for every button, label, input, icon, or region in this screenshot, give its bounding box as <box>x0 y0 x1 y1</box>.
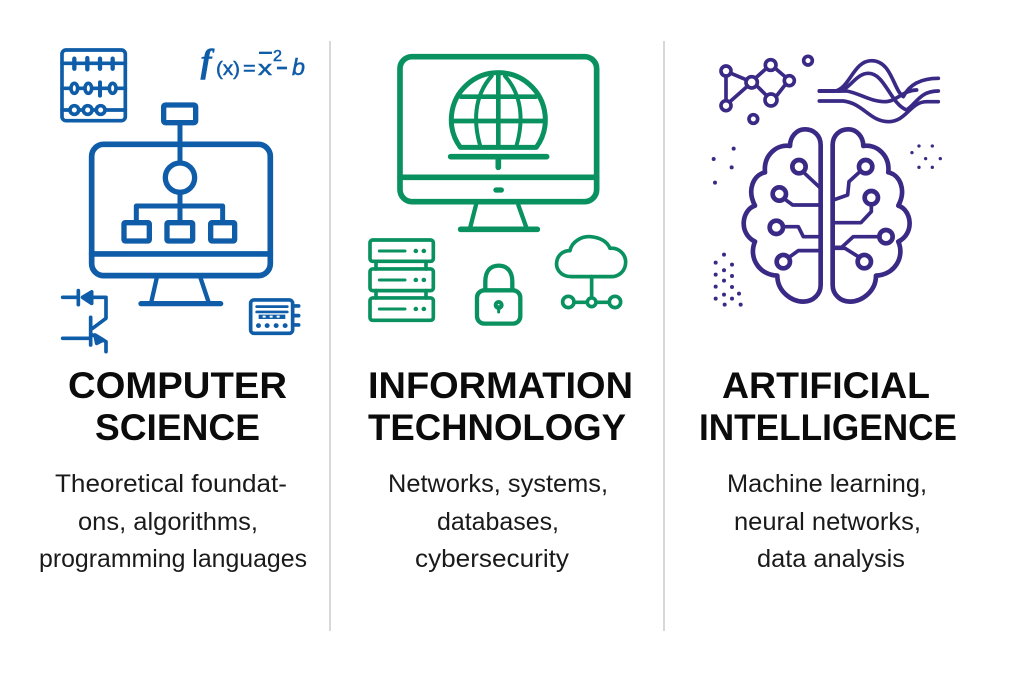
formula: f <box>201 44 215 81</box>
text: computer science description: ons, algorithms, <box>78 508 258 536</box>
heading: artificial intelligence: INTELLIGENCE <box>699 406 957 448</box>
text: artificial intelligence description: Machine learning, <box>727 470 927 498</box>
icon: monitor with hierarchy diagram <box>92 105 270 304</box>
heading: information technology: INFORMATION <box>368 364 633 406</box>
decorative data dots <box>712 144 942 307</box>
icon: diode and transistor symbol <box>63 291 106 352</box>
text: computer science description: Theoretical foundat- <box>55 470 287 498</box>
text: artificial intelligence description: neural networks, <box>734 508 921 536</box>
heading: information technology: TECHNOLOGY <box>368 406 626 448</box>
formula: (x) <box>216 59 240 80</box>
icon: padlock <box>477 266 520 324</box>
icon: cloud network <box>557 237 626 308</box>
text: artificial intelligence description: data analysis <box>757 545 905 573</box>
icon: microchip <box>251 300 299 333</box>
icon: brain with circuits <box>744 129 910 302</box>
icon: abacus <box>62 50 125 121</box>
text: information technology description: Networks, systems, <box>388 470 608 498</box>
text: computer science description: programming languages <box>39 545 307 573</box>
panel: computer science <box>39 44 307 573</box>
panel: artificial intelligence <box>699 56 957 573</box>
heading: computer science: COMPUTER <box>68 364 287 406</box>
icon group: computer science <box>62 44 305 352</box>
formula: x <box>258 57 273 80</box>
icon: node network <box>721 56 812 123</box>
formula <box>201 44 305 81</box>
formula: 2 <box>273 48 282 65</box>
formula: b <box>292 54 305 80</box>
panel: information technology <box>368 57 633 573</box>
icon: wave lines <box>819 61 938 122</box>
formula: = <box>243 57 256 80</box>
icon: server rack <box>370 240 433 320</box>
icon: monitor with globe <box>400 57 597 229</box>
icon group: artificial intelligence <box>712 56 942 307</box>
text: information technology description: databases, <box>437 508 559 536</box>
text: information technology description: cybersecurity <box>415 545 570 573</box>
icon group: information technology <box>370 57 626 324</box>
heading: artificial intelligence: ARTIFICIAL <box>722 364 930 406</box>
heading: computer science: SCIENCE <box>95 406 260 448</box>
